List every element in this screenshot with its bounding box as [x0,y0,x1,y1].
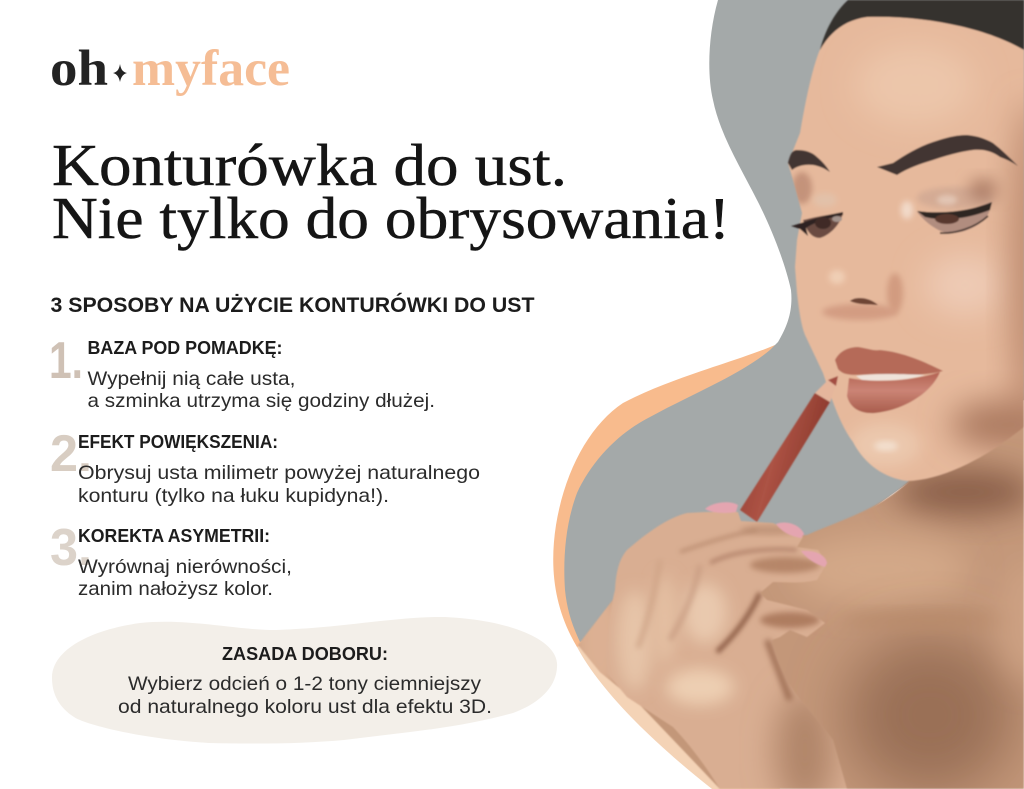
item 2: konturu (tylko na łuku kupidyna!). [78,485,389,507]
logo: oh myface [50,41,290,97]
grey blob [564,0,1024,642]
number 1: 1. [49,332,83,390]
icon: logo star [113,64,127,82]
body: neck and shoulder [578,426,1024,789]
item 1 [49,332,435,412]
face [780,0,1024,490]
item 1: Wypełnij nią całe usta, [88,368,296,390]
callout: selection rule [52,617,557,744]
section heading: 3 SPOSOBY NA UŻYCIE KONTURÓWKI DO UST [50,293,535,317]
nose [850,298,878,305]
lip pencil [740,376,838,522]
item 2: Obrysuj usta milimetr powyżej naturalnego [78,462,480,484]
callout: selection rule: Wybierz odcień o 1-2 tony ciemniejszy [128,673,481,695]
title [52,132,730,251]
eyes [791,202,992,238]
item 1: a szminka utrzyma się godziny dłużej. [88,390,435,412]
item 3: Wyrównaj nierówności, [78,556,292,578]
title: Konturówka do ust. [52,132,567,198]
peach blob [553,345,800,647]
item 2 [50,425,480,507]
number 3: 3. [50,519,92,577]
title: Nie tylko do obrysowania! [52,185,730,251]
eyeshadow [917,187,993,209]
item 2: EFEKT POWIĘKSZENIA: [78,432,278,452]
eyebrows [788,135,1018,175]
hair [820,0,1024,50]
item 3: zanim nałożysz kolor. [78,578,273,600]
lips [835,347,943,413]
item 3 [50,519,292,600]
chin and nose shading [849,423,921,467]
callout: selection rule: od naturalnego koloru ust dla efektu 3D. [118,696,492,718]
number 2: 2. [50,425,92,483]
item 3: KOREKTA ASYMETRII: [78,526,270,546]
logo: oh myface: myface [132,41,290,97]
item 1: BAZA POD POMADKĘ: [88,338,282,358]
photo: woman applying lip liner [570,0,1024,789]
callout: selection rule: ZASADA DOBORU: [222,644,388,664]
peach strip below hand [577,630,780,789]
nails [705,502,827,567]
logo: oh myface: oh [50,41,108,97]
hand [600,500,850,789]
